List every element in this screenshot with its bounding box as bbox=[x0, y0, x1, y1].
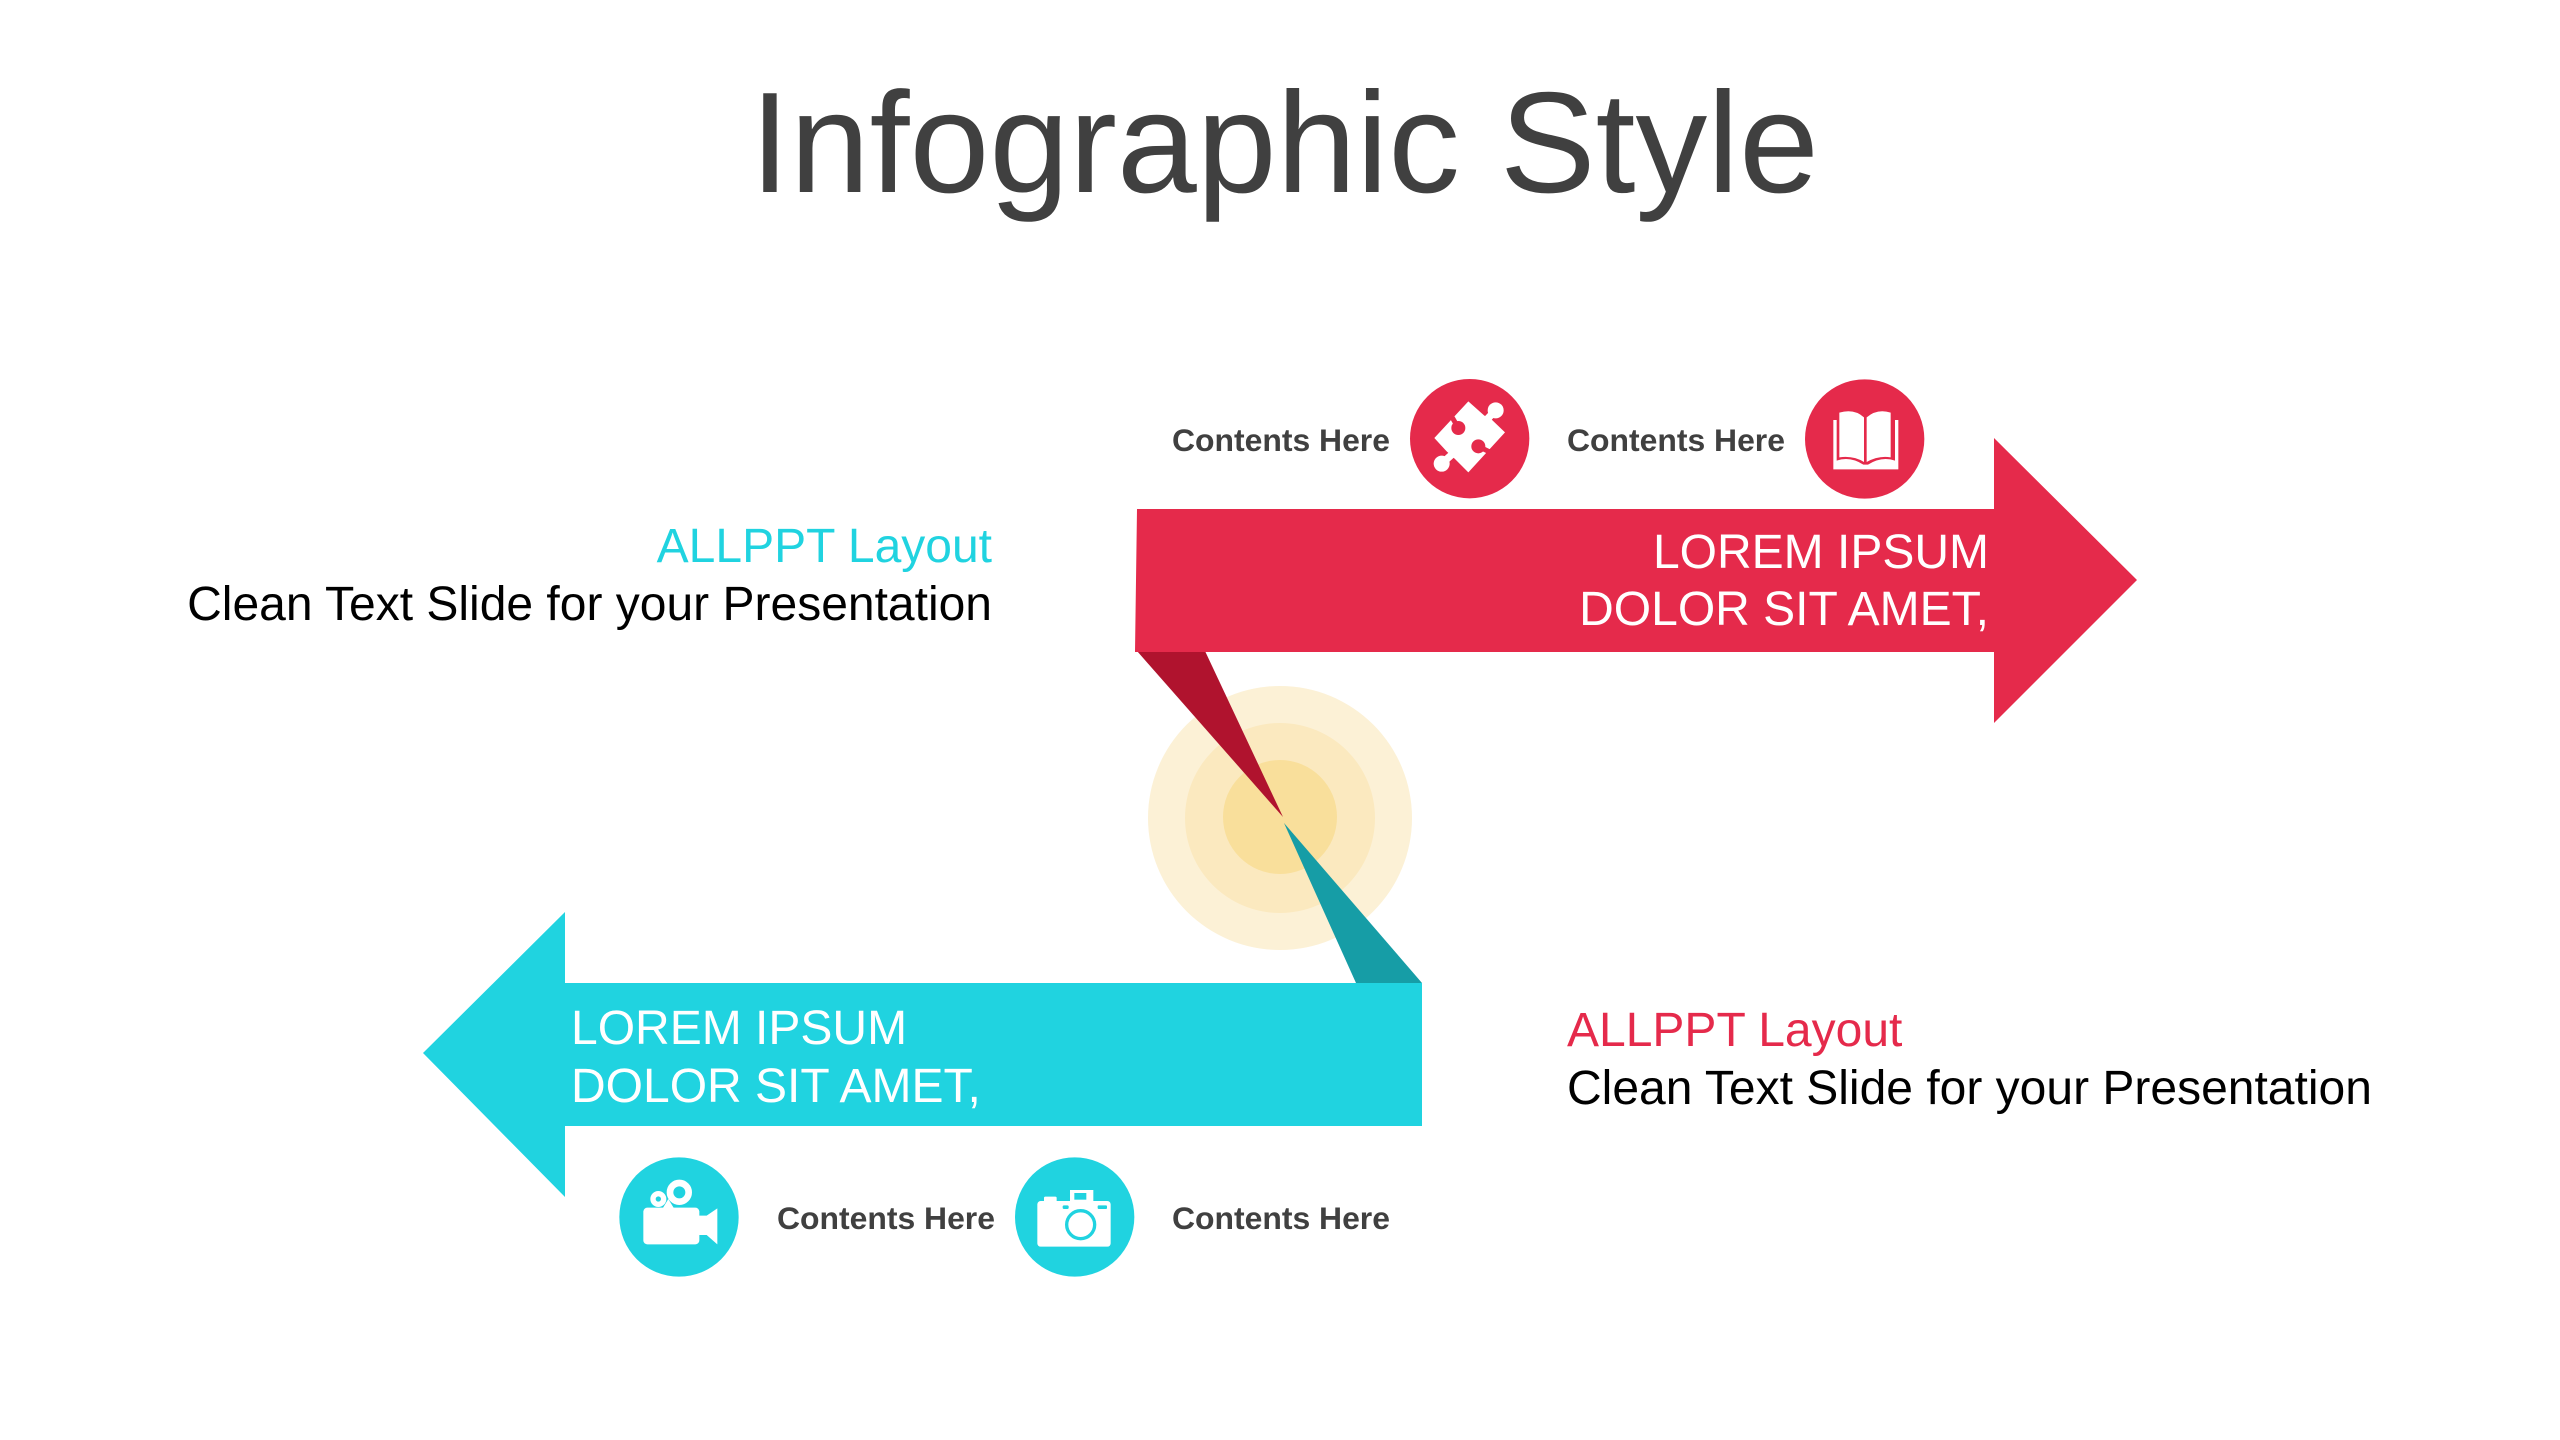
text block: upper left caption: Clean Text Slide for your Presentation bbox=[187, 578, 992, 631]
text block: lower right caption: ALLPPT Layout bbox=[1567, 1004, 1902, 1057]
red arrow bbox=[1135, 438, 2137, 723]
icon: photo camera bbox=[1015, 1157, 1134, 1277]
text block: upper left caption bbox=[187, 520, 992, 631]
cyan arrow text bbox=[571, 1002, 981, 1113]
text block: upper left caption: ALLPPT Layout bbox=[657, 520, 992, 573]
red arrow fold bbox=[1137, 651, 1283, 817]
cyan arrow text: LOREM IPSUM bbox=[571, 1002, 907, 1055]
cyan arrow text: DOLOR SIT AMET, bbox=[571, 1060, 981, 1113]
icon: video camera bbox=[619, 1157, 739, 1277]
cyan arrow bbox=[423, 912, 1422, 1197]
icon: puzzle bbox=[1410, 379, 1529, 498]
text block: lower right caption bbox=[1567, 1004, 2372, 1115]
label: contents here 4: Contents Here bbox=[1172, 1200, 1390, 1236]
icon: book bbox=[1805, 379, 1924, 499]
text block: lower right caption: Clean Text Slide for your Presentation bbox=[1567, 1062, 2372, 1115]
label: contents here 3: Contents Here bbox=[777, 1200, 995, 1236]
label: contents here 1: Contents Here bbox=[1172, 422, 1390, 458]
center target circles bbox=[1148, 686, 1412, 950]
label: contents here 2: Contents Here bbox=[1567, 422, 1785, 458]
red arrow text bbox=[1579, 526, 1989, 636]
title: Infographic Style bbox=[750, 63, 1819, 223]
red arrow text: DOLOR SIT AMET, bbox=[1579, 583, 1989, 636]
teal arrow fold bbox=[1284, 823, 1422, 983]
red arrow text: LOREM IPSUM bbox=[1653, 526, 1989, 579]
